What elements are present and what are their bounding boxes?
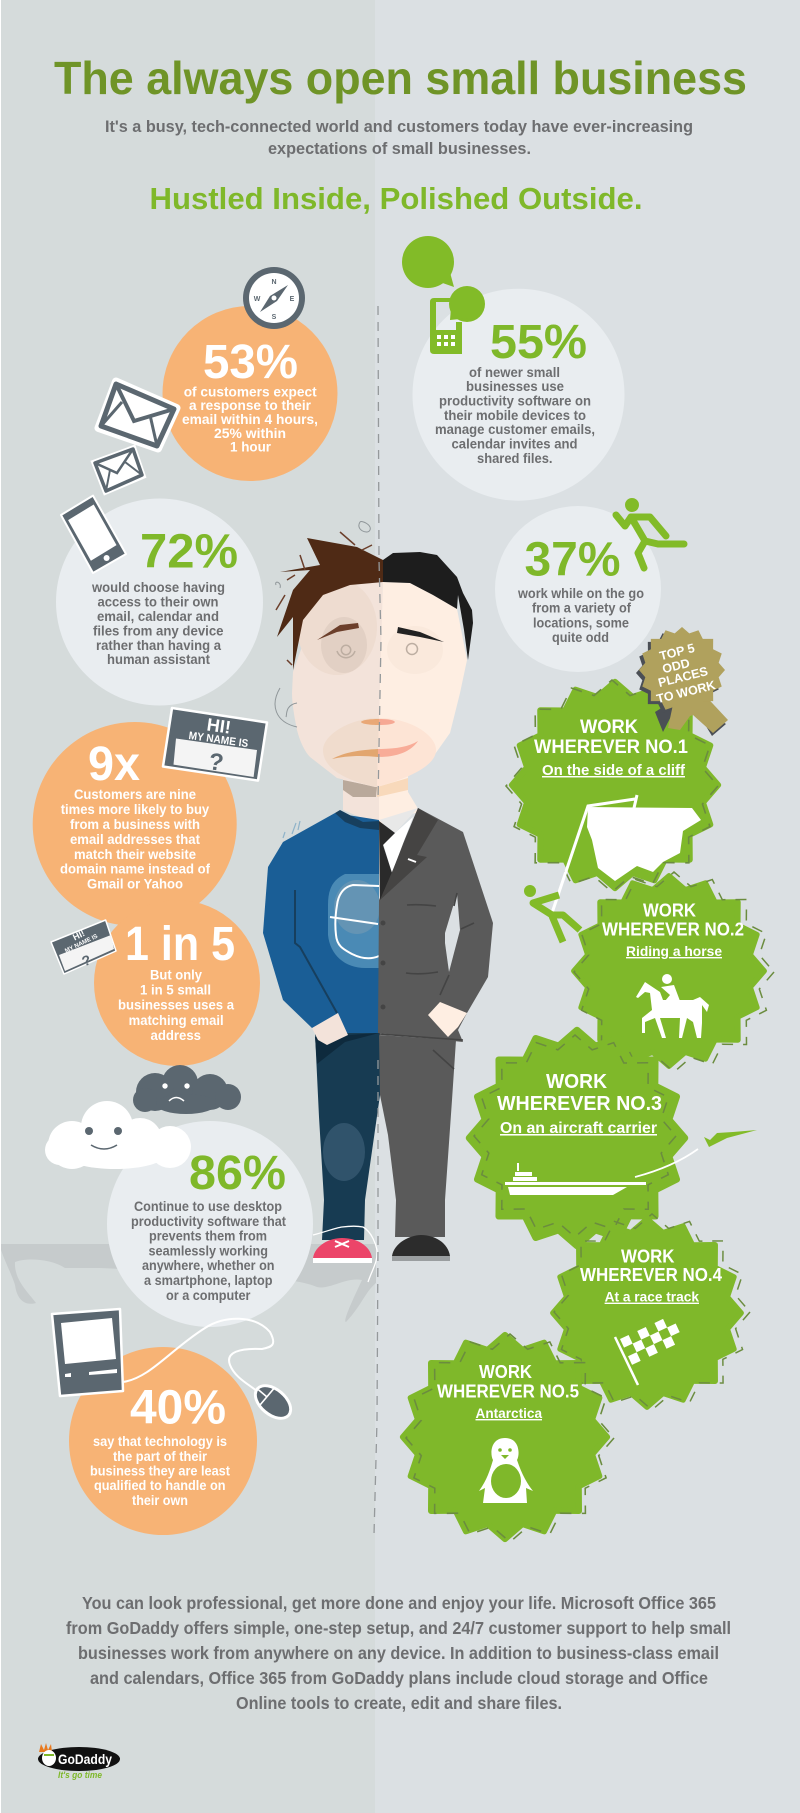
panel: 9x: times more likely to buy: [61, 801, 209, 817]
icon: checkered flag: [615, 1315, 684, 1385]
panel: 37%: 37%: [524, 534, 620, 587]
panel: 1 in 5: matching email: [129, 1012, 224, 1028]
panel: 86%: or a computer: [166, 1288, 251, 1303]
badge: work wherever no.3: WORK: [546, 1070, 607, 1093]
shirt: [383, 817, 413, 873]
knee patch: [323, 1123, 365, 1181]
hands: [312, 1013, 348, 1045]
panel: 9x: Gmail or Yahoo: [87, 876, 183, 892]
icon: name tag large: [163, 708, 267, 781]
mouth shade: [323, 718, 379, 787]
panel: 72%: access to their own: [98, 594, 218, 610]
panel: 40%: the part of their: [113, 1448, 208, 1464]
panel: 1 in 5: But only: [150, 967, 202, 983]
panel: 86%: Continue to use desktop: [134, 1199, 282, 1214]
panel: 40%: say that technology is: [93, 1433, 227, 1449]
figure: half casual half suit man: [263, 522, 493, 1282]
panel: 55%: of newer small: [469, 365, 560, 380]
badge: work wherever no.4: WHEREVER NO.4: [580, 1265, 722, 1285]
icon: large envelope: [98, 382, 176, 448]
panel: 9x: match their website: [74, 846, 196, 862]
badge: top 5 odd places: ODD: [661, 656, 691, 676]
panel: 53%: a response to their: [189, 397, 312, 413]
panel: 40%: qualified to handle on: [94, 1477, 226, 1493]
shoelace: [313, 1226, 377, 1282]
icon: horse and rider: [636, 974, 709, 1038]
badge: work wherever no.4: WORK: [621, 1246, 674, 1266]
panel: 53%: [162, 306, 338, 481]
panel: 55%: businesses use: [466, 379, 564, 394]
icon: compass: [243, 267, 305, 329]
panel: 55%: calendar invites and: [452, 436, 578, 452]
icon: happy cloud: [45, 1101, 191, 1169]
closing paragraph: and calendars, Office 365 from GoDaddy plans include cloud storage and Office: [90, 1668, 708, 1688]
logo: GoDaddy: It's go time: [58, 1770, 102, 1780]
panel: 1 in 5: [94, 900, 260, 1066]
jeans: [315, 1033, 380, 1240]
badge: work wherever no.3: On an aircraft carrier: [500, 1120, 657, 1137]
panel: 9x: domain name instead of: [60, 861, 210, 877]
badge: work wherever no.1: WORK: [580, 717, 638, 738]
jeans shadow: [315, 1033, 379, 1064]
icon: name tag small: [51, 920, 116, 974]
icon: name tag large: HI!: [206, 714, 232, 738]
badge: work wherever no.2: WHEREVER NO.2: [602, 920, 744, 940]
panel: 37%: from a variety of: [532, 601, 631, 616]
chest logo: [328, 874, 380, 968]
icon: aircraft carrier: [505, 1163, 646, 1195]
panel: 55%: manage customer emails,: [435, 422, 595, 437]
icon: sad cloud: [133, 1065, 241, 1114]
subheading: Hustled Inside, Polished Outside.: [150, 182, 642, 216]
badge: work wherever no.5: Antarctica: [476, 1405, 542, 1421]
badge: top 5 odd places: PLACES: [657, 664, 709, 690]
icon: cliff: [587, 807, 701, 881]
divider dashed line: [374, 306, 381, 1535]
neck: [343, 775, 379, 825]
nose: [361, 719, 379, 725]
badge: work wherever no.1: On the side of a cliff: [542, 763, 685, 779]
panel: 86%: 86%: [189, 1147, 286, 1200]
logo: GoDaddy: [38, 1743, 120, 1780]
panel: 72%: would choose having: [91, 580, 225, 595]
closing paragraph: [66, 1593, 731, 1713]
intro text: It's a busy, tech-connected world and customers today have ever-increasing: [105, 118, 693, 136]
panel: 86%: productivity software that: [131, 1214, 286, 1229]
icon: speech bubble large: [402, 236, 454, 288]
badge: work wherever no.1: WHEREVER NO.1: [534, 737, 688, 758]
panel: 86%: prevents them from: [149, 1229, 267, 1244]
eyes: [337, 644, 418, 658]
forehead shade: [297, 579, 377, 675]
title: The always open small business: [54, 52, 747, 104]
badge: work wherever no.2: WORK: [643, 900, 696, 920]
panel: 40%: business they are least: [90, 1463, 230, 1479]
icon: name tag large: MY NAME IS: [188, 730, 249, 750]
icon: jet: [704, 1130, 757, 1147]
intro text: [105, 118, 693, 158]
icon: climber: [524, 885, 580, 942]
icon: compass: E: [290, 296, 295, 303]
closing paragraph: from GoDaddy offers simple, one-step setup, and 24/7 customer support to help small: [66, 1618, 731, 1638]
icon: small envelope: [93, 447, 144, 493]
panel: 72%: email, calendar and: [97, 609, 219, 624]
panel: 9x: [33, 722, 237, 926]
panel: 72%: rather than having a: [96, 638, 221, 653]
icon: compass: S: [272, 314, 277, 321]
panel: 1 in 5: 1 in 5: [125, 918, 235, 971]
badge: work wherever no.3: WHEREVER NO.3: [497, 1092, 662, 1115]
icon: name tag small: MY NAME IS: [64, 934, 99, 955]
badge: work wherever no.1: [506, 680, 718, 942]
badge: work wherever no.5: WORK: [479, 1362, 532, 1382]
panel: 37%: quite odd: [552, 630, 609, 645]
panel: 37%: work while on the go: [517, 586, 644, 601]
logo: GoDaddy: GoDaddy: [58, 1751, 112, 1767]
panel: 55%: 55%: [490, 316, 587, 369]
icon: computer: [52, 1309, 123, 1396]
panel: 9x: Customers are nine: [74, 786, 196, 802]
panel: 55%: their mobile devices to: [444, 408, 586, 423]
icon: compass: W: [254, 296, 261, 303]
panel: 37%: locations, some: [533, 616, 629, 630]
badge: work wherever no.3: [469, 1030, 757, 1246]
eye shade left: [321, 617, 367, 673]
panel: 53%: of customers expect: [184, 384, 317, 400]
right shoe: [392, 1235, 450, 1261]
badge: work wherever no.5: WHEREVER NO.5: [437, 1381, 579, 1401]
panel: 1 in 5: 1 in 5 small: [140, 982, 211, 998]
panel: 72%: files from any device: [93, 624, 224, 638]
closing paragraph: Online tools to create, edit and share files.: [236, 1693, 562, 1713]
tie: [379, 821, 395, 900]
panel: 53%: 53%: [203, 336, 298, 389]
badge: work wherever no.4: [553, 1214, 750, 1410]
icon: compass: N: [271, 279, 277, 286]
icon: mouse cable: [123, 1319, 273, 1392]
suit trousers: [379, 1035, 456, 1237]
panel: 86%: anywhere, whether on: [142, 1258, 274, 1273]
sweater arm line: [295, 890, 337, 1013]
left shoe: [313, 1238, 372, 1263]
mouth: [332, 749, 378, 759]
icon: mobile phone with bubble: [430, 286, 485, 354]
eyebrow left: [317, 623, 359, 640]
panel: 9x: email addresses that: [70, 831, 200, 847]
badge: work wherever no.4: At a race track: [605, 1289, 699, 1305]
face right: [377, 582, 467, 787]
panel: 9x: 9x: [88, 738, 140, 791]
badge: work wherever no.2: Riding a horse: [626, 943, 722, 959]
panel: 72%: [56, 498, 263, 706]
hair right: [383, 552, 473, 660]
panel: 55%: shared files.: [477, 451, 552, 466]
icon: running man: [616, 498, 684, 568]
panel: 9x: from a business with: [70, 816, 200, 832]
hair left: [277, 538, 383, 670]
icon: name tag large: ?: [207, 748, 225, 777]
badge: work wherever no.5: [403, 1334, 614, 1542]
panel: 40%: 40%: [130, 1382, 226, 1435]
scribbles: [275, 522, 370, 727]
panel: 37%: [495, 506, 661, 672]
panel: 1 in 5: address: [150, 1027, 201, 1043]
floor shadow: [1, 1244, 376, 1322]
closing paragraph: You can look professional, get more done and enjoy your life. Microsoft Office 365: [82, 1593, 716, 1613]
panel: 1 in 5: businesses uses a: [118, 996, 234, 1012]
eye shade right: [387, 626, 443, 674]
panel: 86%: a smartphone, laptop: [144, 1273, 272, 1288]
sweater: [263, 813, 379, 1033]
badge: top 5 odd places: [636, 627, 728, 736]
panel: 72%: 72%: [140, 526, 238, 578]
badge: top 5 odd places: TOP 5: [658, 641, 696, 663]
intro text: expectations of small businesses.: [268, 140, 531, 158]
lapel: [380, 808, 438, 900]
panel: 53%: 1 hour: [230, 439, 272, 455]
icon: penguin: [479, 1438, 533, 1503]
suit jacket: [378, 808, 493, 1042]
eyebrow right: [397, 627, 444, 642]
panel: 40%: [69, 1347, 257, 1535]
panel: 53%: 25% within: [214, 425, 286, 441]
panel: 86%: seamlessly working: [148, 1244, 268, 1258]
shirt collar: [379, 808, 418, 833]
closing paragraph: businesses work from anywhere on any device. In addition to business-class email: [78, 1643, 719, 1663]
badge: top 5 odd places: TO WORK: [655, 678, 717, 706]
icon: tablet phone: [61, 496, 126, 573]
panel: 55%: productivity software on: [439, 394, 591, 409]
panel: 53%: email within 4 hours,: [182, 411, 318, 427]
panel: 55%: [412, 289, 624, 501]
face left: [292, 582, 383, 787]
badge: work wherever no.2: [574, 872, 774, 1072]
icon: name tag small: HI!: [71, 928, 86, 942]
panel: 86%: [107, 1121, 313, 1327]
panel: 40%: their own: [132, 1492, 188, 1508]
panel: 72%: human assistant: [107, 652, 210, 667]
icon: mouse: [247, 1377, 299, 1427]
icon: name tag small: ?: [80, 951, 93, 969]
